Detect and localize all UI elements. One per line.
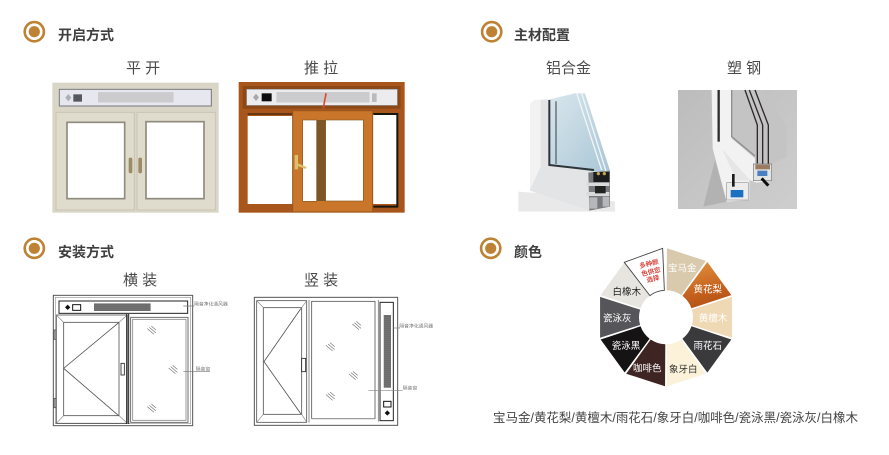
- label: uPVC: 塑 钢: [727, 60, 761, 77]
- label: casement: 平 开: [126, 60, 160, 77]
- segment: ivory: 象牙白: [669, 364, 698, 376]
- label: horizontal mount: 横 装: [123, 272, 157, 289]
- drawing: vertical mount window: 隔音净化通风器: [399, 322, 433, 329]
- label: aluminium: 铝合金: [546, 60, 591, 77]
- segment: ceramic grey: [588, 286, 645, 338]
- label: vertical mount: 竖 装: [304, 272, 338, 289]
- chart: colour wheel: [588, 238, 744, 397]
- segment: baomajin: [667, 248, 706, 295]
- segment: ceramic black: [593, 312, 652, 373]
- segment: baomajin: 宝马金: [668, 262, 697, 274]
- segment: coffee: 咖啡色: [633, 362, 662, 374]
- heading: installation method: 安装方式: [58, 244, 114, 260]
- heading: opening method: 开启方式: [58, 27, 114, 43]
- photo: casement window: [52, 83, 219, 213]
- drawing: vertical mount window: [254, 297, 433, 425]
- segment: huanghuali: [680, 262, 739, 323]
- colour list: 宝马金/黄花梨/黄檀木/雨花石/象牙白/咖啡色/瓷泳黑/瓷泳灰/白橡木: [493, 410, 858, 425]
- segment: white oak: 白橡木: [612, 286, 641, 298]
- icon: section bullet material: [482, 22, 501, 41]
- segment: huangtanmu: 黄檀木: [699, 312, 728, 324]
- heading: main material: 主材配置: [514, 27, 570, 43]
- segment: huanghuali: 黄花梨: [693, 284, 722, 296]
- segment: custom colours note: 多种颜: [638, 257, 660, 270]
- photo: uPVC profile: [678, 90, 797, 209]
- segment: custom colours note: 色供您: [640, 265, 662, 278]
- segment: huangtanmu: [687, 297, 744, 348]
- segment: yuhuashi: 雨花石: [693, 340, 722, 352]
- label: sliding: 推 拉: [304, 60, 338, 77]
- drawing: horizontal mount window: [53, 295, 228, 426]
- drawing: vertical mount window: 隔音窗: [403, 385, 417, 392]
- segment: ceramic grey: 瓷泳灰: [603, 312, 632, 324]
- photo: aluminium profile: [518, 93, 615, 212]
- segment: coffee: [626, 340, 665, 386]
- segment: white oak: [601, 258, 657, 310]
- icon: section bullet colour: [481, 239, 500, 258]
- heading: colour: 颜色: [514, 244, 542, 260]
- segment: ceramic black: 瓷泳黑: [612, 340, 641, 352]
- icon: section bullet installation: [25, 239, 44, 258]
- drawing: horizontal mount window: 隔音窗: [196, 365, 210, 372]
- segment: yuhuashi: [675, 325, 731, 376]
- segment: custom colours note: [624, 238, 684, 299]
- icon: section bullet opening: [25, 22, 44, 41]
- segment: custom colours note: 选择: [645, 272, 661, 284]
- drawing: horizontal mount window: 隔音净化通风器: [194, 300, 228, 307]
- segment: ivory: [647, 336, 706, 397]
- photo: sliding window: [239, 82, 405, 213]
